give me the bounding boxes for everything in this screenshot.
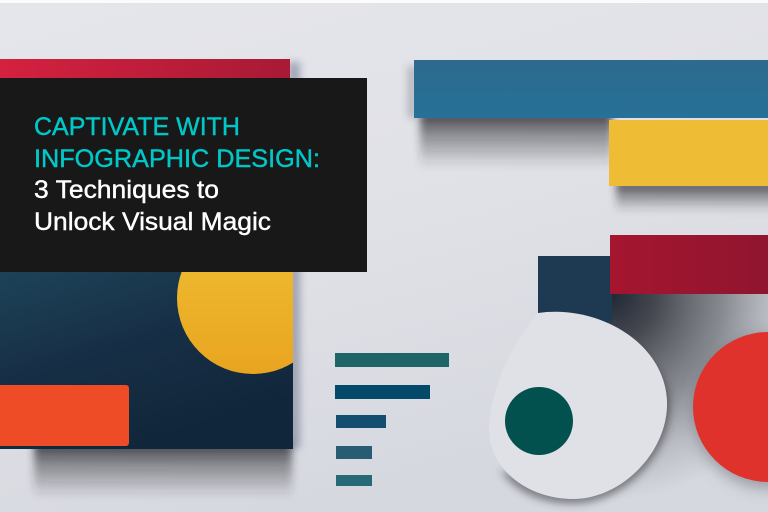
heading (34, 113, 320, 236)
white circle (489, 312, 667, 499)
yellow bar (609, 120, 768, 186)
navy square (0, 265, 293, 449)
icon: yellow circle (177, 272, 293, 374)
poster shadow (34, 442, 292, 498)
panel: top right bars (408, 60, 768, 212)
navy square (538, 256, 612, 322)
panel: title box (0, 78, 367, 272)
orange block (0, 385, 129, 446)
blue bar (414, 60, 768, 118)
bar chart (335, 353, 449, 486)
icon: red circle (693, 332, 768, 482)
icon: teal dot (505, 387, 573, 455)
icon: red circle shadow (694, 336, 768, 488)
heading: Unlock Visual Magic (34, 208, 271, 236)
panel: left poster (0, 59, 329, 498)
top edge strip (0, 0, 768, 3)
panel: lower right shapes (489, 235, 768, 512)
shadow region (560, 288, 768, 512)
white shape shadow (500, 330, 670, 504)
heading: INFOGRAPHIC DESIGN: (34, 145, 320, 173)
crimson bar (610, 235, 768, 294)
heading: CAPTIVATE WITH (34, 113, 240, 141)
red top bar (0, 59, 290, 84)
heading: 3 Techniques to (34, 176, 219, 204)
bar shadows (420, 112, 612, 168)
